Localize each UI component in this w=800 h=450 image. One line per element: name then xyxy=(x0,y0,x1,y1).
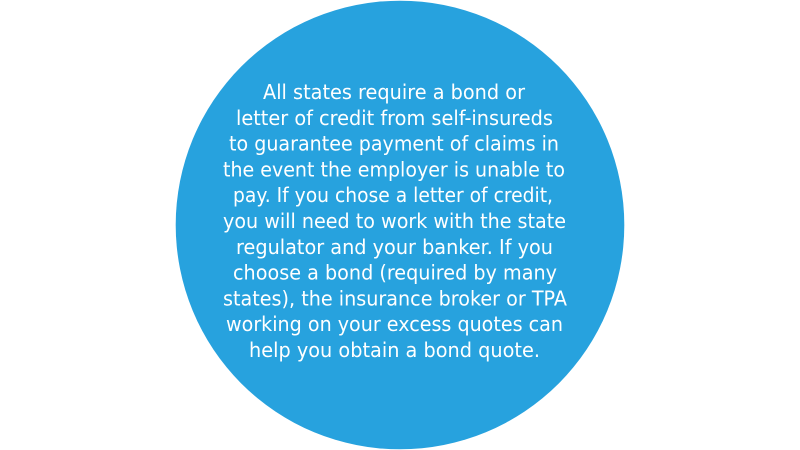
text block: bond or letter of credit explanation: letter of credit from self-insureds xyxy=(236,106,553,130)
text block: bond or letter of credit explanation: choose a bond (required by many xyxy=(233,261,557,285)
text block: bond or letter of credit explanation: help you obtain a bond quote. xyxy=(249,338,540,362)
text block: bond or letter of credit explanation: pay. If you chose a letter of credit, xyxy=(233,183,553,207)
text block: bond or letter of credit explanation: you will need to work with the state xyxy=(223,209,566,233)
text block: bond or letter of credit explanation: to guarantee payment of claims in xyxy=(229,132,559,156)
text block: bond or letter of credit explanation: working on your excess quotes can xyxy=(226,312,563,336)
text block: bond or letter of credit explanation xyxy=(223,80,567,362)
text block: bond or letter of credit explanation: states), the insurance broker or TPA xyxy=(223,286,567,310)
text block: bond or letter of credit explanation: All states require a bond or xyxy=(263,80,526,104)
text block: bond or letter of credit explanation: regulator and your banker. If you xyxy=(236,235,553,259)
panel: blue circle xyxy=(176,1,624,449)
text block: bond or letter of credit explanation: the event the employer is unable to xyxy=(223,157,565,181)
